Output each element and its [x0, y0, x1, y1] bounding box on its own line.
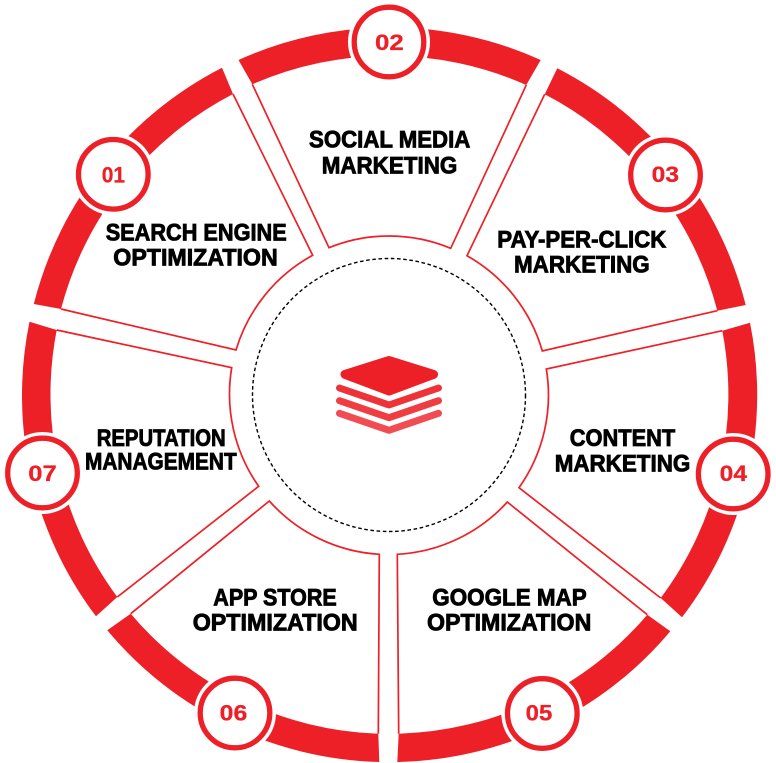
label: app store optimization: OPTIMIZATION: [193, 609, 358, 636]
badge 07: [2, 432, 84, 514]
badge 04: 04: [720, 461, 748, 486]
label: content marketing: MARKETING: [555, 450, 690, 477]
label: app store optimization: APP STORE: [213, 584, 337, 611]
badge 07: 07: [28, 461, 57, 486]
label: social media marketing: SOCIAL MEDIA: [309, 127, 470, 154]
ring segment 04: [661, 323, 757, 617]
panel: search engine optimization: [34, 68, 313, 350]
label: social media marketing: [309, 127, 470, 179]
center dashed circle: [252, 258, 526, 532]
badge 02: [348, 1, 430, 83]
label: pay-per-click marketing: PAY-PER-CLICK: [497, 227, 667, 254]
wedge outline 04: [519, 331, 722, 598]
wedge outline 06: [131, 501, 379, 734]
label: app store optimization: [193, 584, 358, 636]
label: search engine optimization: OPTIMIZATION: [113, 245, 278, 272]
label: social media marketing: MARKETING: [322, 152, 457, 179]
ring segment 07: [22, 322, 117, 616]
panel: content marketing: [519, 323, 774, 617]
label: reputation management: [85, 425, 237, 476]
panel: pay-per-click marketing: [467, 68, 746, 351]
label: reputation management: REPUTATION: [97, 425, 226, 452]
badge 02: 02: [375, 30, 404, 55]
label: search engine optimization: SEARCH ENGINE: [106, 220, 287, 247]
badge 01: [72, 133, 154, 215]
badge 05: [501, 672, 583, 754]
label: pay-per-click marketing: MARKETING: [514, 252, 650, 279]
panel: app store optimization: [107, 501, 379, 762]
ring segment 03: [545, 68, 746, 311]
wedge outline 02: [252, 84, 526, 248]
panel: social media marketing: [238, 1, 541, 248]
label: content marketing: CONTENT: [570, 425, 676, 452]
ring segment 01: [34, 68, 233, 309]
ring segment 05: [397, 615, 670, 762]
panel: google map optimization: [397, 502, 670, 762]
label: search engine optimization: [106, 220, 287, 272]
label: google map optimization: [427, 584, 591, 636]
badge 05: 05: [526, 700, 552, 725]
panel: reputation management: [2, 322, 259, 616]
icon: layered stack: [340, 360, 438, 430]
badge 06: 06: [220, 700, 247, 725]
label: reputation management: MANAGEMENT: [85, 449, 237, 476]
wedge outline 01: [61, 94, 313, 350]
wedge outline 07: [57, 330, 259, 597]
wedge outline 05: [397, 502, 647, 734]
badge 03: [624, 134, 706, 216]
badge 04: [692, 433, 774, 515]
label: content marketing: [555, 425, 690, 477]
label: pay-per-click marketing: [497, 227, 667, 279]
ring segment 06: [107, 614, 379, 762]
label: google map optimization: GOOGLE MAP: [432, 584, 587, 611]
label: google map optimization: OPTIMIZATION: [427, 609, 591, 636]
ring segment 02: [238, 27, 541, 85]
badge 01: 01: [102, 162, 125, 188]
badge 03: 03: [652, 162, 679, 187]
badge 06: [194, 672, 276, 754]
wedge outline 03: [467, 94, 717, 351]
